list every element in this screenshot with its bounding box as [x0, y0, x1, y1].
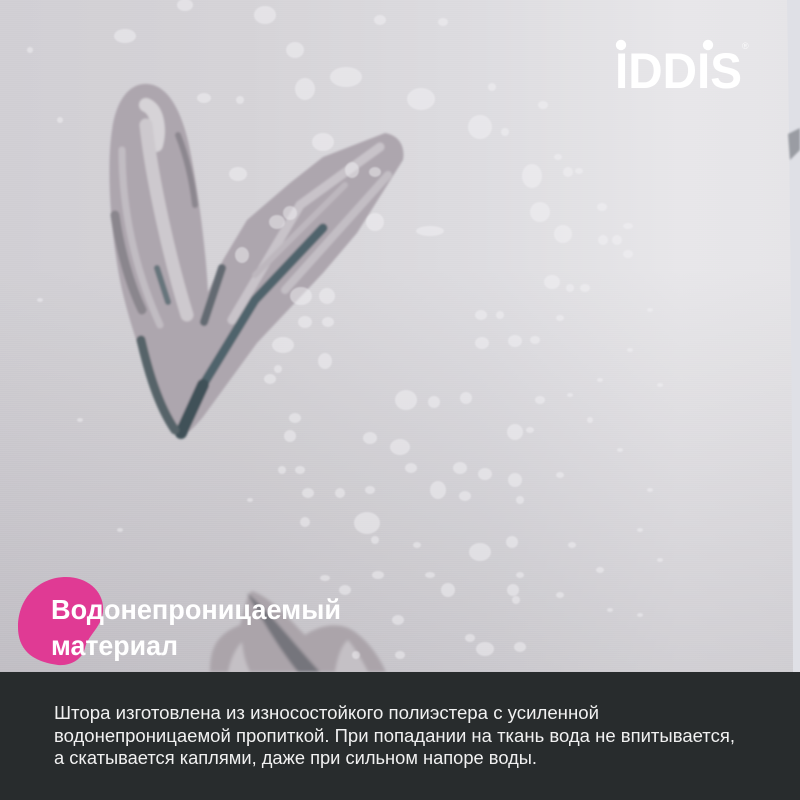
caption text: [54, 703, 735, 768]
caption text: а скатывается каплями, даже при сильном напоре воды.: [54, 748, 537, 768]
heading: материал: [51, 630, 178, 661]
caption text: Штора изготовлена из износостойкого полиэстера с усиленной: [54, 703, 599, 723]
brand logo: iDDiS: ®: [742, 41, 749, 51]
heading: [51, 594, 341, 661]
heading: Водонепроницаемый: [51, 594, 341, 625]
pale gaps in right lobe: [232, 147, 380, 320]
brand logo: iDDiS: IDDIS: [615, 43, 742, 99]
pale gaps in left lobe: [146, 105, 158, 145]
background strip with curtain rod at right edge: [787, 0, 800, 672]
pink blob behind heading: [18, 577, 103, 665]
caption text: водонепроницаемой пропиткой. При попадании на ткань вода не впитывается,: [54, 726, 735, 746]
dark marker strokes: [203, 228, 323, 385]
printed heart, partial at bottom: [210, 591, 386, 672]
caption band: [0, 672, 800, 800]
water droplets: [27, 0, 663, 659]
printed heart, large: [109, 84, 404, 434]
